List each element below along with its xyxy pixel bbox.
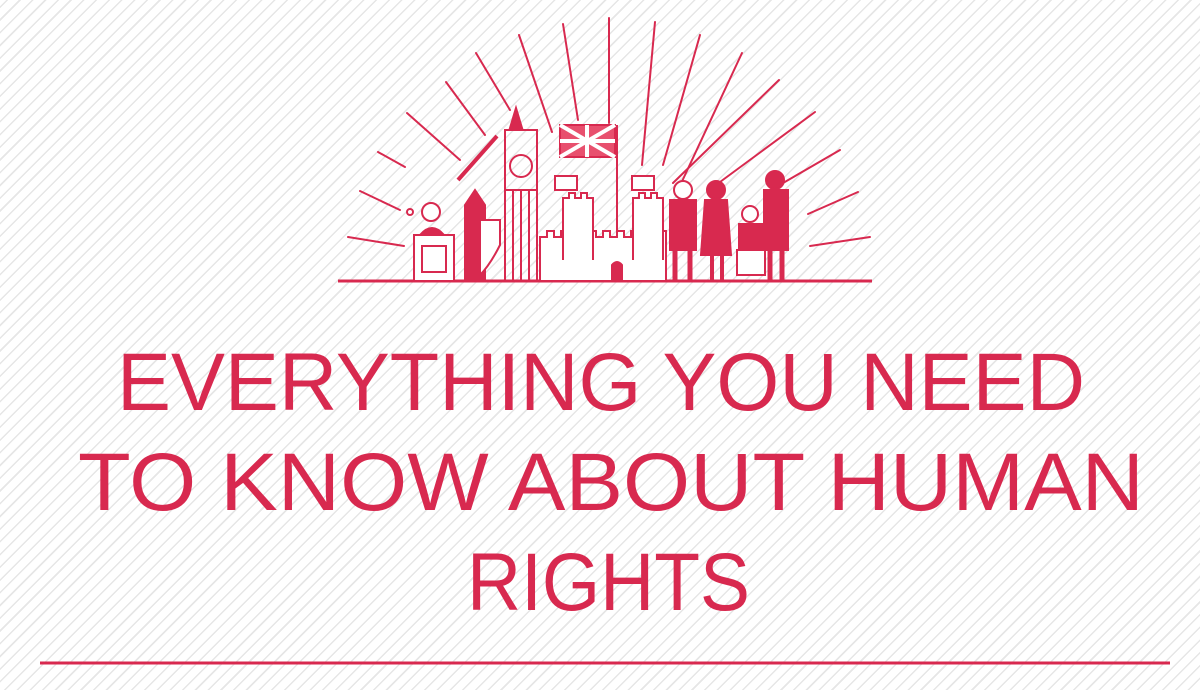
illustration: group of people	[670, 171, 788, 281]
title: RIGHTS	[467, 537, 750, 628]
illustration: Big Ben	[505, 108, 537, 281]
bottom rule	[40, 662, 1170, 664]
title: TO KNOW ABOUT HUMAN	[78, 437, 1144, 528]
illustration: sunburst rays	[348, 18, 870, 246]
illustration: castle with flags	[540, 125, 666, 281]
title: EVERYTHING YOU NEED	[117, 337, 1085, 428]
illustration: judge at lectern	[407, 203, 454, 281]
title	[78, 337, 1144, 628]
illustration: knight	[458, 136, 500, 281]
illustration: ground line	[338, 280, 872, 282]
